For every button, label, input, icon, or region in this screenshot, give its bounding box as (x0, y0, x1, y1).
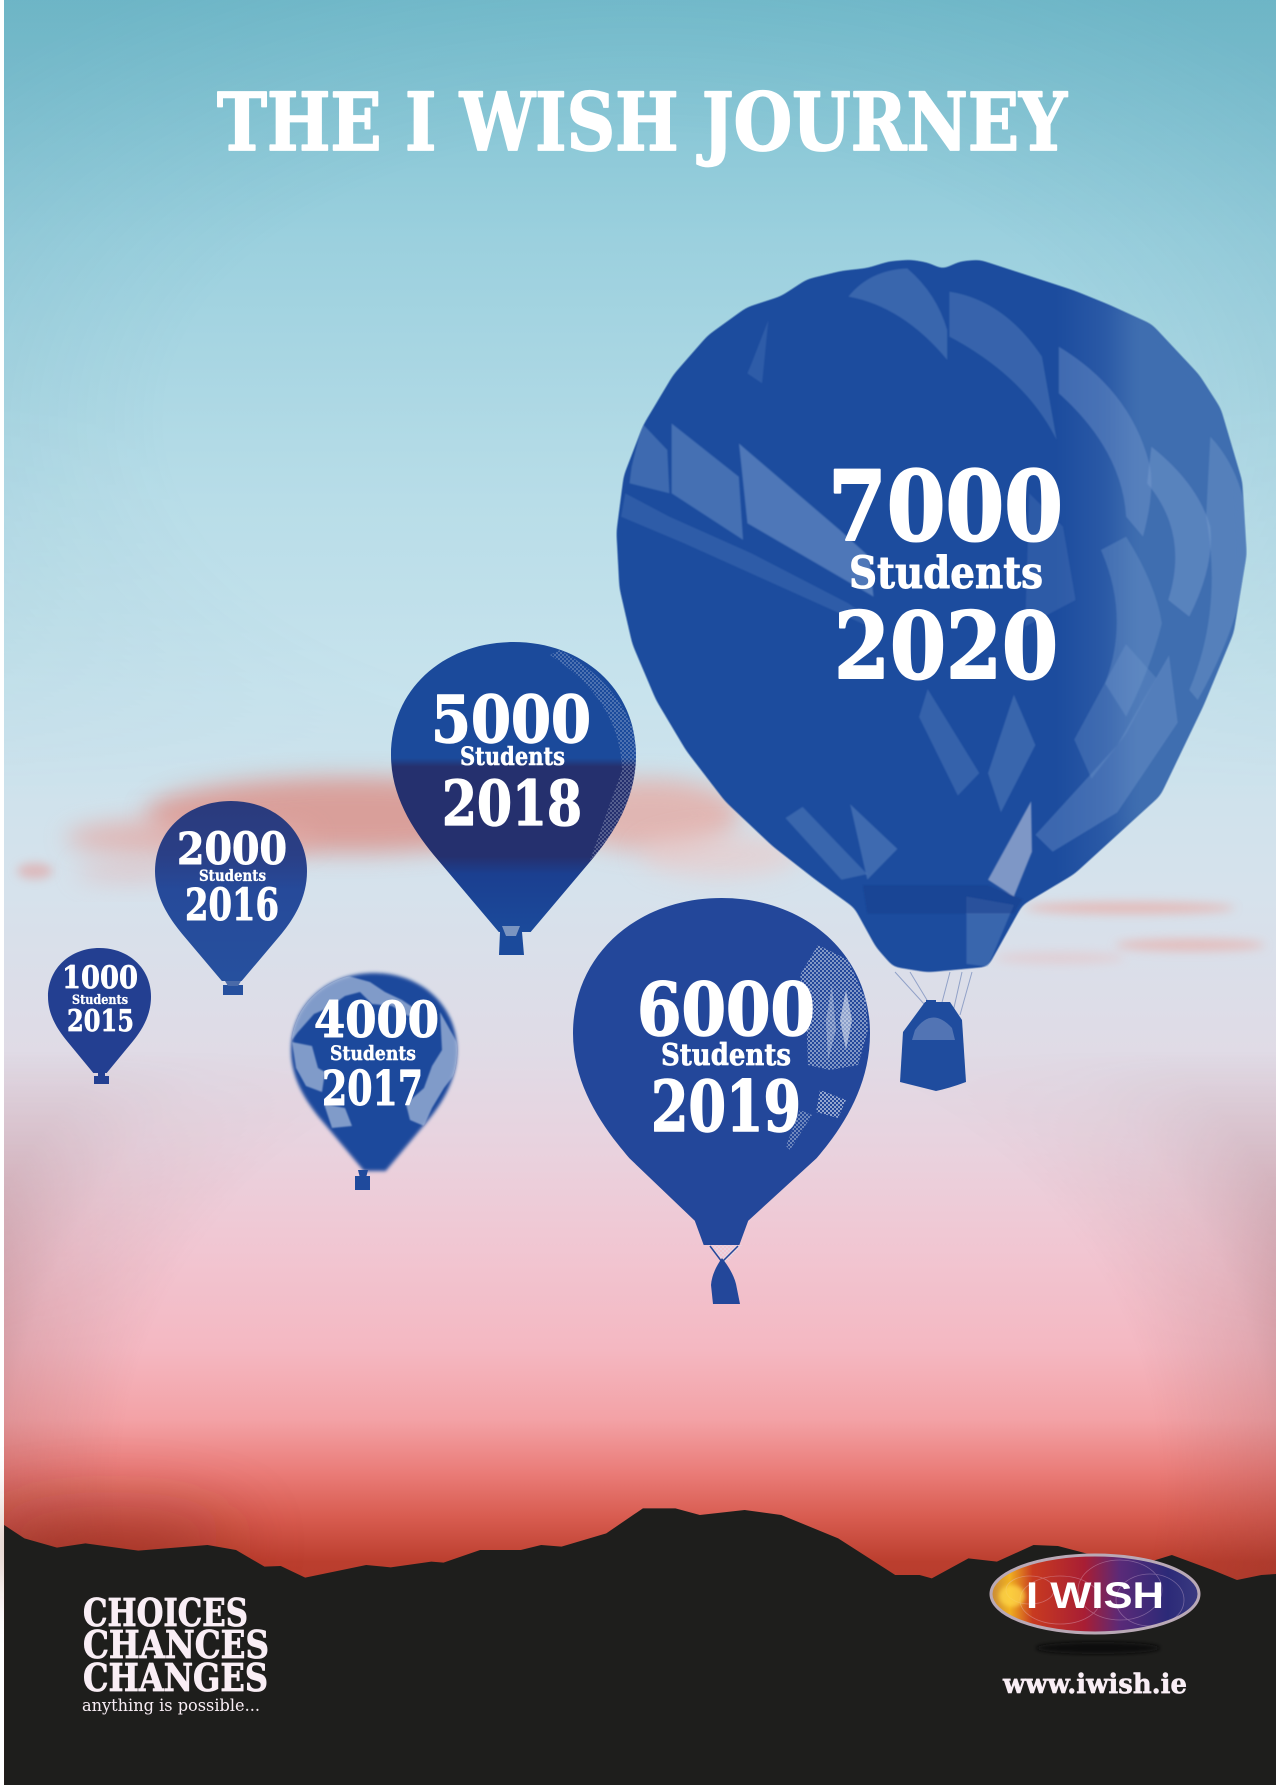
balloon: 2000 students 2016: 2000 (177, 824, 287, 875)
basket and ropes (895, 972, 972, 1091)
balloon: 4000 students 2017: Students (330, 1041, 416, 1065)
balloon: 1000 students 2015: 1000 (62, 960, 138, 996)
balloon: 6000 students 2019 (573, 898, 870, 1304)
balloon: 2000 students 2016 (155, 801, 307, 995)
slogan: choices chances changes: anything is possible... (82, 1696, 260, 1716)
envelope (616, 260, 1250, 972)
balloon: 7000 students 2020: 2020 (834, 592, 1058, 700)
balloon: 7000 students 2020: 7000 (828, 450, 1063, 563)
balloon: 4000 students 2017 (290, 973, 458, 1190)
balloon: 6000 students 2019: 2019 (651, 1065, 801, 1148)
title: THE I WISH JOURNEY (217, 75, 1068, 169)
slogan: choices chances changes (82, 1590, 269, 1716)
balloon: 6000 students 2019: 6000 (637, 967, 815, 1053)
website url: www.iwish.ie (1002, 1669, 1187, 1700)
logo: I WISH: I WISH (1026, 1575, 1164, 1616)
mountain silhouette (4, 1508, 1276, 1785)
balloon: 7000 students 2020 (616, 260, 1250, 1091)
balloon: 6000 students 2019: Students (661, 1038, 791, 1073)
clouds (17, 777, 1265, 964)
balloon: 5000 students 2018: 2018 (442, 767, 582, 840)
balloon: 4000 students 2017: 4000 (314, 990, 439, 1049)
balloon: 1000 students 2015 (48, 948, 151, 1084)
balloon: 5000 students 2018: Students (460, 742, 565, 771)
balloon: 1000 students 2015: Students (72, 993, 128, 1008)
slogan: choices chances changes: CHANGES (83, 1655, 268, 1700)
balloon: 2000 students 2016: Students (199, 866, 266, 885)
balloon: 2000 students 2016: 2016 (185, 880, 279, 931)
logo: I WISH (991, 1555, 1199, 1654)
balloon: 5000 students 2018 (391, 642, 640, 955)
balloon: 5000 students 2018: 5000 (431, 682, 591, 758)
slogan: choices chances changes: CHOICES (83, 1590, 248, 1635)
balloon: 7000 students 2020: Students (849, 548, 1043, 599)
balloon: 4000 students 2017: 2017 (322, 1061, 423, 1117)
balloon: 1000 students 2015: 2015 (67, 1004, 134, 1039)
slogan: choices chances changes: CHANCES (83, 1622, 269, 1667)
